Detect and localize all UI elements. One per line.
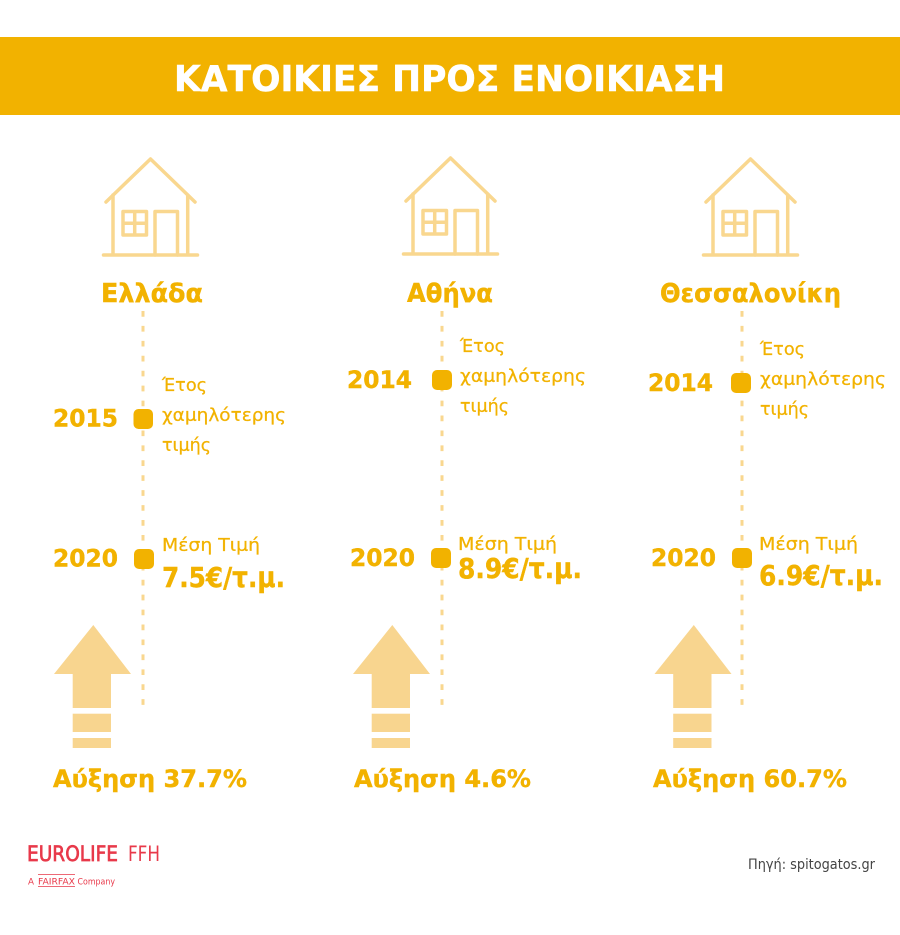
marker: 2020 [134, 549, 154, 569]
year: 2020: 2020 [53, 544, 118, 572]
timeline: dashed line [440, 311, 444, 706]
icon: up arrow [353, 625, 430, 748]
text: average price label: Μέση Τιμή [759, 534, 858, 555]
icon: house [704, 159, 798, 255]
panel: Athens [347, 158, 586, 793]
icon: up arrow [54, 625, 131, 748]
text: lowest price year: χαμηλότερης [760, 369, 886, 390]
text: average price value: 6.9€/τ.μ. [759, 559, 883, 592]
text: lowest price year: χαμηλότερης [460, 366, 586, 387]
icon: up arrow [654, 625, 732, 748]
text: increase: Αύξηση 4.6% [354, 765, 531, 793]
timeline: dashed line [740, 311, 744, 706]
text: lowest price year: Έτος [161, 375, 207, 396]
marker: 2020 [431, 548, 451, 568]
logo: Eurolife FFH [27, 842, 160, 888]
logo: Eurolife FFH: FFH [128, 842, 160, 866]
heading: Athens: Αθήνα [407, 279, 493, 309]
year: 2015: 2015 [53, 404, 118, 432]
year: 2014: 2014 [347, 366, 412, 394]
text: average price label: Μέση Τιμή [458, 534, 557, 555]
text: average price value: 8.9€/τ.μ. [458, 552, 582, 585]
source note: Πηγή: spitogatos.gr [748, 857, 875, 873]
year: 2020: 2020 [350, 544, 415, 572]
text: average price label: Μέση Τιμή [162, 535, 260, 556]
logo: Eurolife FFH: FAIRFAX [38, 878, 75, 888]
text: increase: Αύξηση 60.7% [653, 765, 847, 793]
marker: 2015 [134, 409, 153, 429]
text: lowest price year [459, 336, 586, 417]
heading: Greece: Ελλάδα [101, 279, 203, 309]
title banner [0, 37, 900, 115]
heading: Thessaloniki: Θεσσαλονίκη [660, 279, 841, 309]
marker: 2020 [732, 548, 752, 568]
panel: Greece [53, 159, 286, 793]
text: lowest price year [759, 339, 886, 420]
text: increase: Αύξηση 37.7% [53, 765, 247, 793]
icon: house [104, 159, 198, 255]
icon: house [404, 158, 498, 254]
timeline: dashed line [142, 311, 144, 706]
year: 2014: 2014 [648, 369, 713, 397]
year: 2020: 2020 [651, 544, 716, 572]
text: lowest price year: Έτος [459, 336, 505, 357]
text: lowest price year [161, 375, 286, 456]
text: lowest price year: τιμής [162, 435, 211, 456]
marker: 2014 [731, 373, 751, 393]
logo: Eurolife FFH: Company [78, 878, 116, 888]
logo: Eurolife FFH: EUROLIFE [27, 842, 118, 866]
logo: Eurolife FFH: A [28, 878, 35, 888]
marker: 2014 [432, 370, 452, 390]
text: average price value: 7.5€/τ.μ. [162, 561, 285, 594]
text: lowest price year: τιμής [760, 399, 809, 420]
panel: Thessaloniki [648, 159, 886, 793]
text: lowest price year: χαμηλότερης [162, 405, 286, 426]
text: lowest price year: Έτος [759, 339, 805, 360]
text: lowest price year: τιμής [460, 396, 509, 417]
title banner: ΚΑΤΟΙΚΙΕΣ ΠΡΟΣ ΕΝΟΙΚΙΑΣΗ [174, 59, 725, 100]
